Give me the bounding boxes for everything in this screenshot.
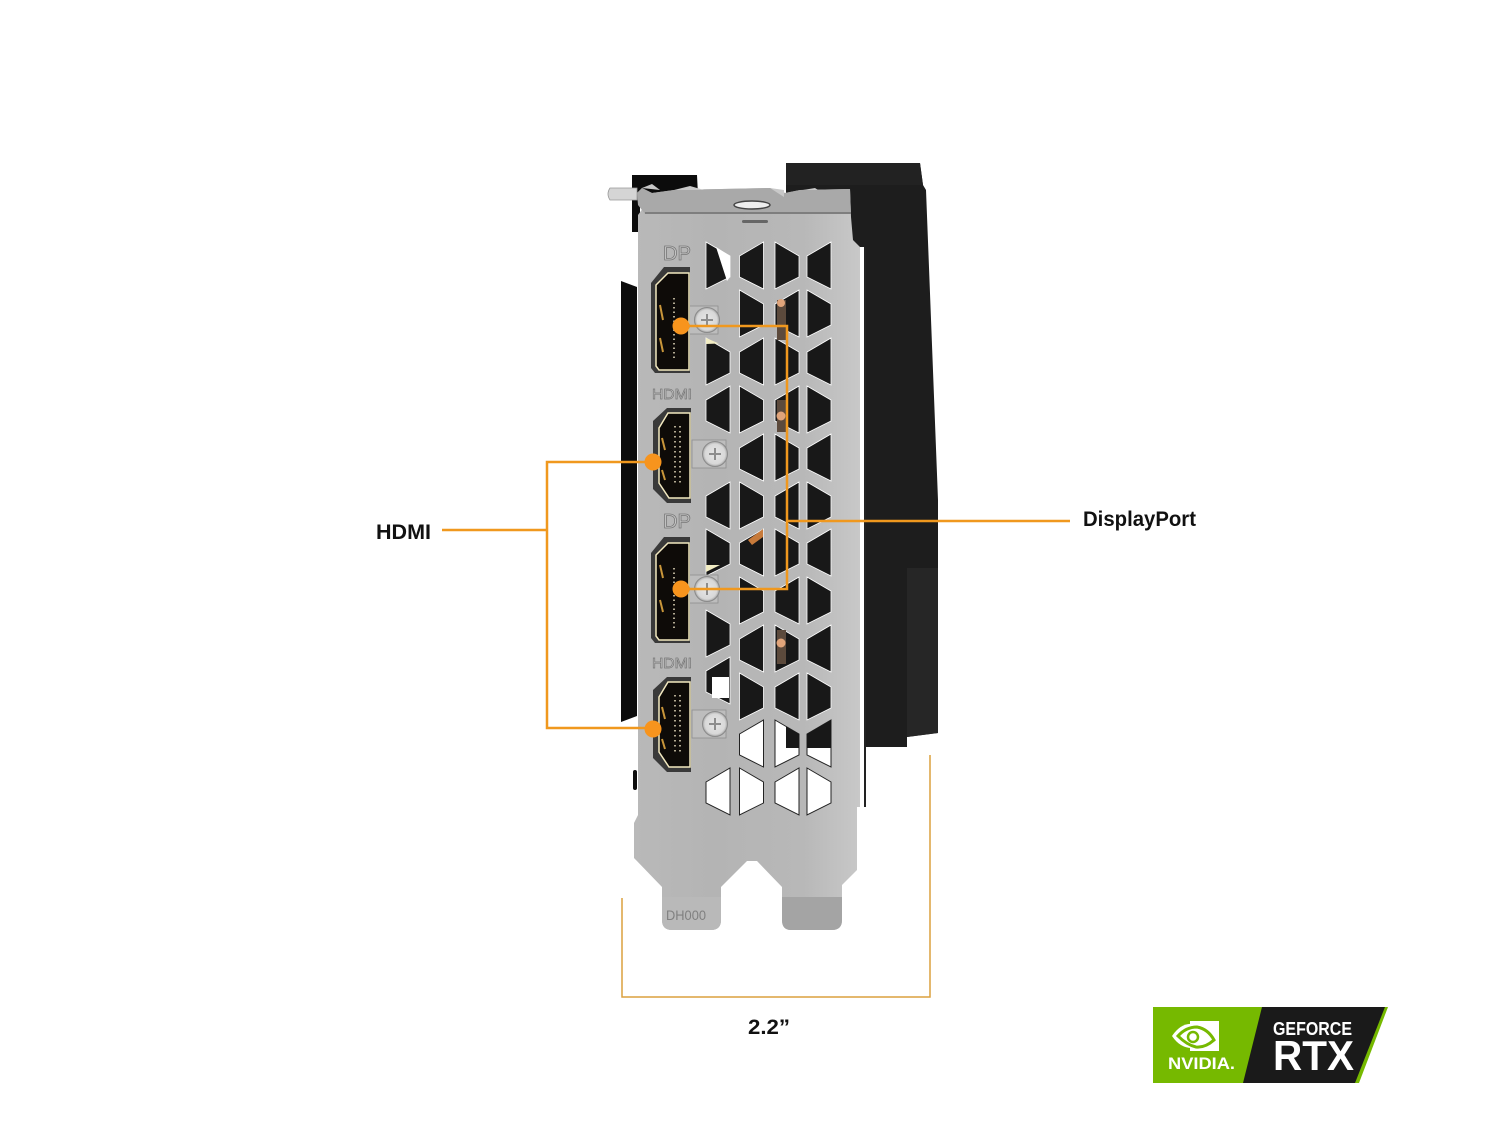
metal I/O bracket <box>608 184 866 930</box>
label: width: 2.2” <box>748 1016 790 1039</box>
callout lines: DisplayPort <box>681 326 1070 589</box>
bracket port engravings: HDMI <box>652 655 692 672</box>
screw plates <box>688 306 726 738</box>
cream reflections <box>706 338 720 572</box>
bracket port engravings: DH000 <box>666 907 706 923</box>
DisplayPort connector top <box>651 267 690 373</box>
bracket port engravings: HDMI <box>652 386 692 403</box>
screws <box>694 308 728 736</box>
HDMI connector top <box>653 408 691 503</box>
graphics card heatsink body <box>700 163 938 748</box>
width dimension bracket <box>622 755 930 997</box>
copper heat pipes <box>748 299 786 664</box>
ventilation holes <box>706 242 831 815</box>
callout lines: HDMI <box>442 462 653 728</box>
dark fill through lower holes <box>786 720 831 748</box>
bracket feet shading <box>662 897 721 930</box>
bracket port engravings: DP <box>663 243 691 265</box>
label: HDMI: HDMI <box>376 521 431 544</box>
NVIDIA GeForce RTX badge <box>1153 1007 1388 1083</box>
badge black panel <box>1243 1007 1385 1083</box>
DisplayPort connector bottom <box>651 537 690 643</box>
NVIDIA eye icon <box>1172 1021 1219 1051</box>
bracket port engravings <box>652 243 706 923</box>
HDMI connector bottom <box>653 677 691 772</box>
NVIDIA wordmark: NVIDIA. <box>1168 1055 1235 1073</box>
edge highlight <box>860 247 864 807</box>
white open holes <box>706 720 831 815</box>
GEFORCE wordmark: GEFORCE <box>1273 1019 1352 1039</box>
bracket top fold <box>637 188 851 214</box>
bracket side tab <box>608 188 637 200</box>
label: DisplayPort: DisplayPort <box>1083 508 1196 531</box>
RTX wordmark: RTX <box>1273 1032 1354 1079</box>
callout dots <box>644 318 690 738</box>
badge green panel <box>1153 1007 1388 1083</box>
white gaps through holes <box>712 247 730 698</box>
left side card shroud <box>621 175 698 790</box>
bracket plate <box>634 188 860 930</box>
bracket port engravings: DP <box>663 511 691 533</box>
